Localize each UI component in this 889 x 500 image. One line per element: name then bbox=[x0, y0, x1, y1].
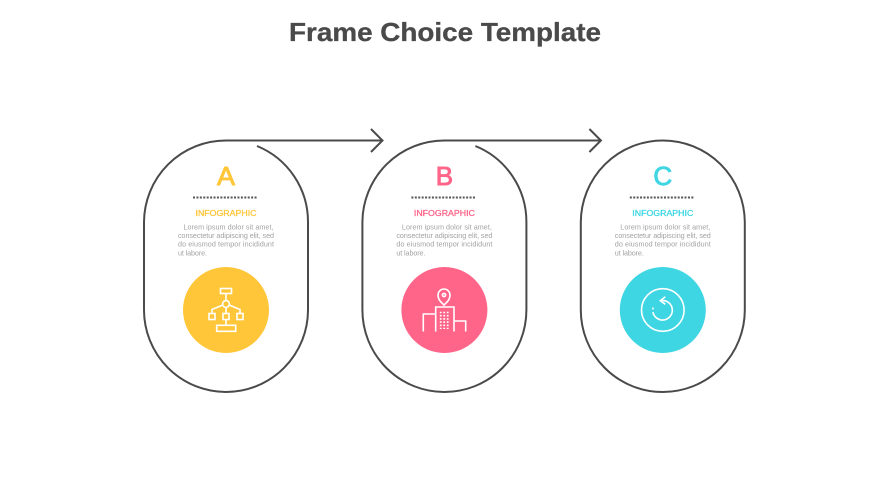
text block B bbox=[396, 222, 492, 258]
text block B: ut labore. bbox=[396, 248, 425, 258]
frame with arrow A bbox=[144, 129, 382, 392]
letter B: B bbox=[436, 161, 453, 191]
dotted divider A bbox=[193, 196, 258, 198]
panel: A bbox=[144, 129, 382, 392]
dotted divider C bbox=[630, 196, 695, 198]
text block C bbox=[615, 222, 711, 258]
text block B: do eiusmod tempor incididunt bbox=[396, 240, 492, 248]
icon: city location bbox=[423, 289, 466, 332]
icon: flowchart bbox=[209, 288, 243, 331]
text block B: Lorem ipsum dolor sit amet, bbox=[402, 222, 492, 232]
text block A: do eiusmod tempor incididunt bbox=[178, 240, 274, 248]
icon circle B bbox=[401, 267, 487, 353]
text block C: do eiusmod tempor incididunt bbox=[615, 240, 711, 248]
text block A: ut labore. bbox=[178, 248, 207, 258]
text block A: consectetur adipiscing elit, sed bbox=[178, 231, 274, 240]
title: Frame Choice Template bbox=[289, 17, 601, 47]
letter A: A bbox=[217, 161, 236, 191]
frame C bbox=[581, 140, 745, 392]
subheading A: INFOGRAPHIC bbox=[196, 209, 257, 218]
text block C: consectetur adipiscing elit, sed bbox=[615, 231, 711, 240]
icon: circular arrow bbox=[642, 289, 684, 331]
icon circle C bbox=[620, 267, 706, 353]
subheading B: INFOGRAPHIC bbox=[414, 209, 475, 218]
text block C: ut labore. bbox=[615, 248, 644, 258]
dotted divider B bbox=[411, 196, 476, 198]
subheading C: INFOGRAPHIC bbox=[632, 209, 693, 218]
letter C: C bbox=[653, 161, 672, 191]
text block A bbox=[178, 222, 274, 258]
icon circle A bbox=[183, 267, 269, 353]
text block C: Lorem ipsum dolor sit amet, bbox=[620, 222, 710, 232]
panel: C bbox=[581, 140, 745, 392]
text block B: consectetur adipiscing elit, sed bbox=[396, 231, 492, 240]
frame with arrow B bbox=[362, 129, 601, 392]
panel: B bbox=[362, 129, 601, 392]
text block A: Lorem ipsum dolor sit amet, bbox=[184, 222, 274, 232]
